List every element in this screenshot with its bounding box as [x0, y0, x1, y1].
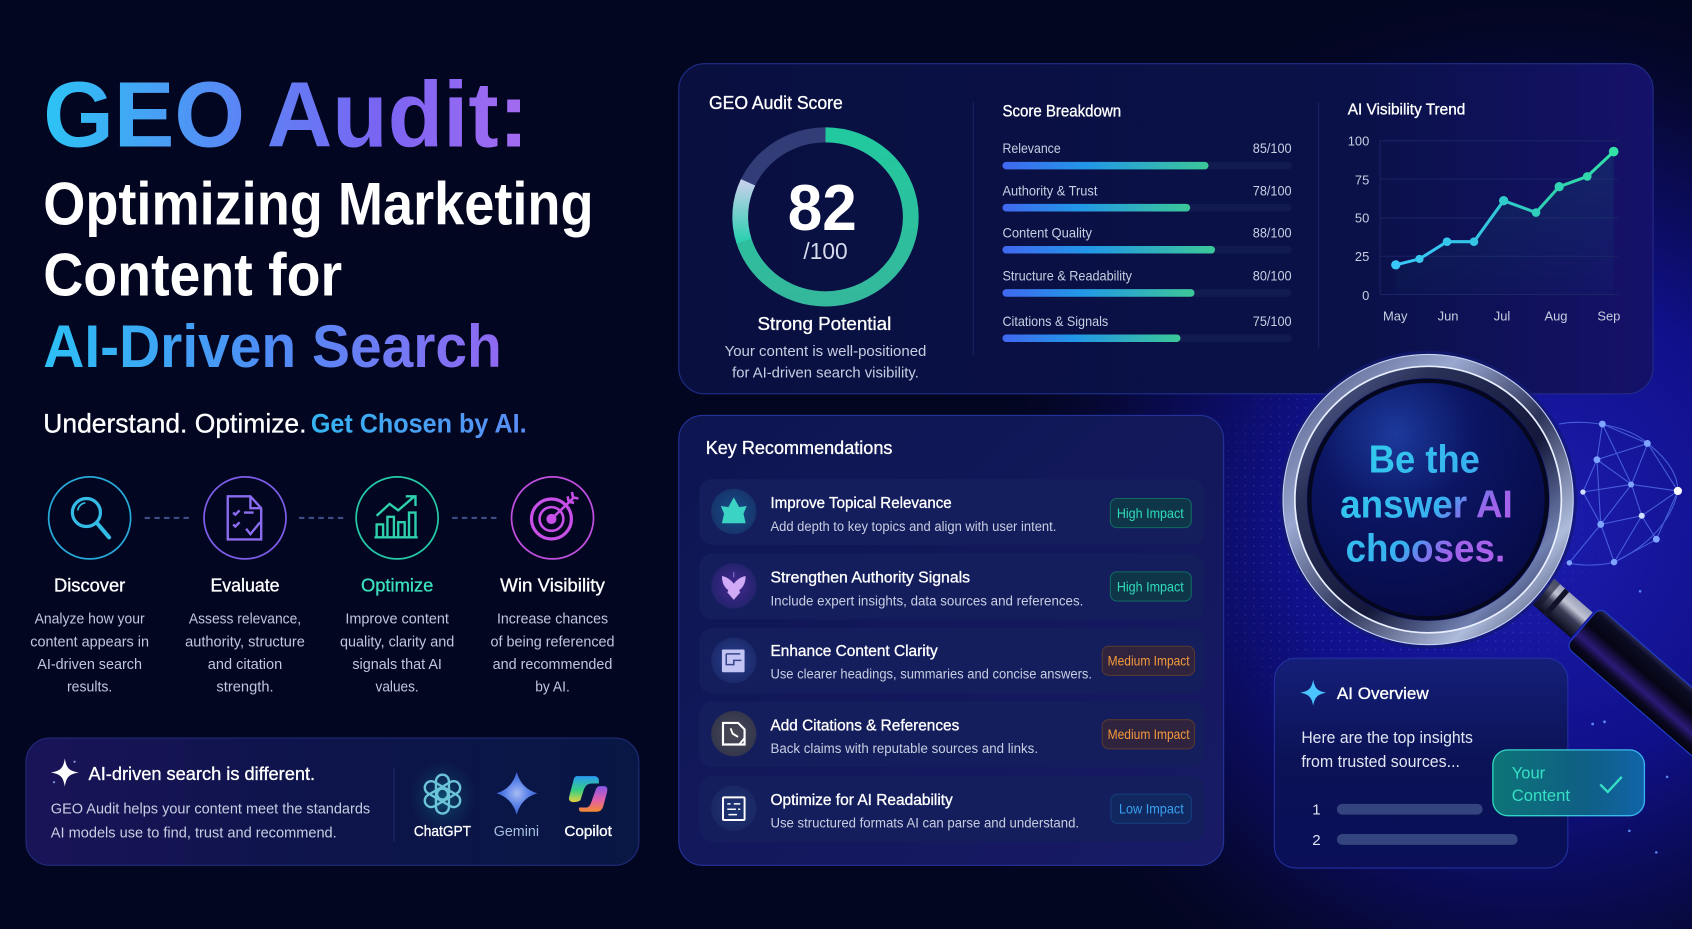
title line: Content for: Content for [43, 241, 342, 309]
magnifier handle [1532, 579, 1692, 795]
GEO audit score gauge: for AI-driven search visibility. [732, 365, 919, 382]
bar: Structure and Readability [1002, 269, 1292, 297]
line chart: AI visibility trend: Sep [1597, 308, 1620, 323]
bar: Citations and Signals [1002, 314, 1292, 342]
step: Optimize: signals that AI [352, 656, 442, 673]
tagline: Understand. Optimize. [43, 409, 307, 439]
badge: medium impact [1102, 720, 1195, 749]
bar: Content Quality: Content Quality [1002, 225, 1092, 240]
bar: Relevance: Relevance [1002, 141, 1061, 156]
panel: AI overview: AI Overview [1337, 684, 1430, 703]
icon: white outlined document [711, 711, 756, 756]
title line: AI-Driven Search: AI-Driven Search [43, 312, 502, 380]
line chart: AI visibility trend: Jul [1494, 308, 1510, 323]
badge: medium impact [1102, 646, 1195, 675]
recommendation: citations and references: Add Citations & References [770, 717, 959, 734]
recommendation: topical relevance [699, 479, 1204, 545]
recommendation: topical relevance: Add depth to key topics and align with user intent. [770, 518, 1056, 534]
line chart: AI visibility trend: 25 [1355, 249, 1369, 264]
badge: low impact [1111, 794, 1191, 823]
panel: key recommendations: Key Recommendations [706, 437, 892, 458]
line chart: AI visibility trend: Aug [1544, 308, 1567, 323]
step: Evaluate: and citation [208, 656, 282, 673]
recommendation: authority signals: Strengthen Authority Signals [770, 570, 970, 587]
step: Optimize: values. [376, 679, 419, 696]
panel: AI-driven search is different: GEO Audit helps your content meet the standards [51, 801, 370, 818]
callout: your content [1493, 750, 1644, 816]
icon: blue sparkle [1300, 680, 1326, 706]
badge: high impact: High Impact [1117, 506, 1184, 521]
lens text: chooses. [1346, 528, 1505, 571]
step: Win Visibility [490, 477, 615, 696]
magnifying glass [1279, 351, 1692, 795]
bar: Relevance: 85/100 [1253, 141, 1292, 156]
recommendation: AI readability: Use structured formats AI can parse and understand. [770, 815, 1079, 831]
line chart: AI visibility trend: 50 [1355, 210, 1369, 225]
GEO audit score gauge [709, 92, 926, 382]
recommendation: citations and references: Back claims with reputable sources and links. [770, 740, 1038, 756]
badge: medium impact: Medium Impact [1108, 654, 1190, 669]
step: Win Visibility: and recommended [493, 656, 612, 673]
lens text [1340, 439, 1513, 571]
bar: Structure and Readability: Structure & Readability [1002, 269, 1132, 284]
callout: your content: Content [1512, 786, 1570, 805]
recommendation: content clarity [699, 628, 1204, 694]
badge: high impact [1110, 572, 1191, 601]
panel: AI overview: from trusted sources... [1301, 753, 1460, 771]
badge: high impact [1110, 498, 1191, 528]
line chart: AI visibility trend: Jun [1438, 308, 1458, 323]
icon: target with arrow [512, 477, 594, 559]
GEO audit score gauge: Your content is well-positioned [725, 343, 926, 360]
lens text: answer AI [1340, 483, 1513, 526]
recommendation: citations and references [699, 701, 1204, 767]
score breakdown [1002, 103, 1292, 342]
step: Evaluate [185, 477, 305, 696]
recommendation: AI readability: Optimize for AI Readability [770, 792, 953, 809]
bar: Content Quality [1002, 225, 1292, 254]
recommendation: topical relevance: Improve Topical Relevance [770, 495, 952, 512]
line chart: AI visibility trend [1348, 101, 1620, 323]
callout: your content: Your [1512, 763, 1546, 782]
score ring [740, 135, 911, 299]
panel: score dashboard [679, 64, 1653, 394]
icon: lilac document [711, 638, 756, 683]
bar: Relevance [1002, 141, 1292, 169]
step: Discover: AI-driven search [37, 656, 142, 673]
lens text: Be the [1369, 439, 1480, 482]
tagline: Get Chosen by AI. [311, 409, 527, 439]
panel: AI-driven search is different: Gemini [494, 823, 539, 840]
title block [43, 63, 594, 380]
step: Evaluate: authority, structure [185, 633, 305, 650]
panel: AI-driven search is different: AI-driven search is different. [89, 763, 315, 784]
bar: Authority and Trust: 78/100 [1253, 183, 1292, 198]
step: Win Visibility: of being referenced [490, 633, 615, 650]
step: Win Visibility: by AI. [535, 679, 570, 696]
title line: GEO Audit: GEO Audit: [43, 63, 529, 167]
step: Optimize: quality, clarity and [340, 633, 454, 650]
icon: check mark [1600, 777, 1622, 792]
GEO audit score gauge: /100 [803, 238, 848, 264]
panel: AI overview: 2 [1312, 832, 1321, 849]
panel: AI-driven search is different: Copilot [564, 823, 613, 840]
recommendation: content clarity: Enhance Content Clarity [770, 643, 938, 660]
title line: Optimizing Marketing: Optimizing Marketing [43, 169, 594, 237]
panel: AI-driven search is different: ChatGPT [414, 823, 471, 840]
GEO audit score gauge: Strong Potential [758, 313, 891, 334]
icon: ChatGPT [409, 760, 476, 835]
network globe [1559, 421, 1682, 565]
recommendation: authority signals [699, 554, 1204, 619]
recommendation: AI readability [699, 776, 1204, 842]
step: Optimize: Optimize [361, 574, 433, 595]
GEO audit score gauge: GEO Audit Score [709, 92, 843, 113]
step: Discover: results. [67, 679, 112, 696]
step: Optimize: Improve content [345, 611, 450, 628]
step: Evaluate: strength. [216, 679, 274, 696]
step: Optimize [340, 477, 454, 696]
panel: key recommendations [679, 415, 1224, 865]
step: Discover: Discover [54, 574, 125, 595]
badge: medium impact: Medium Impact [1108, 727, 1190, 742]
panel: AI overview: 1 [1312, 802, 1321, 819]
bar: Citations and Signals: Citations & Signals [1002, 314, 1108, 329]
score breakdown: Score Breakdown [1002, 103, 1121, 121]
line chart: AI visibility trend: AI Visibility Trend [1348, 101, 1465, 118]
line chart: AI visibility trend: 100 [1348, 134, 1369, 149]
icon: Gemini star [496, 772, 537, 815]
panel: AI-driven search is different [26, 738, 639, 865]
icon: lilac butterfly [711, 563, 756, 609]
icon: white sparkle [51, 759, 79, 787]
icon: magnifying glass [49, 477, 131, 559]
icon: growth chart [356, 477, 438, 559]
line chart: AI visibility trend: May [1383, 308, 1408, 323]
icon: structured document [711, 785, 756, 831]
step: Discover [30, 477, 149, 696]
bar: Structure and Readability: 80/100 [1253, 269, 1292, 284]
process connectors [145, 517, 500, 519]
recommendation: content clarity: Use clearer headings, summaries and concise answers. [770, 666, 1092, 682]
badge: high impact: High Impact [1117, 579, 1184, 594]
panel: AI overview: Here are the top insights [1301, 729, 1473, 747]
panel: AI overview [1274, 658, 1568, 868]
tagline [43, 409, 527, 439]
bar: Citations and Signals: 75/100 [1253, 314, 1292, 329]
step: Win Visibility: Win Visibility [500, 574, 606, 595]
panel: AI-driven search is different: AI models use to find, trust and recommend. [51, 824, 337, 841]
magnifier lens [1279, 351, 1577, 648]
step: Evaluate: Assess relevance, [189, 611, 301, 628]
background [1058, 40, 1692, 929]
icon: Copilot [569, 776, 607, 812]
step: Evaluate: Evaluate [210, 574, 280, 595]
line chart: AI visibility trend: 0 [1362, 288, 1369, 303]
recommendation: authority signals: Include expert insights, data sources and references. [770, 592, 1083, 608]
step: Win Visibility: Increase chances [497, 611, 608, 628]
bar: Authority and Trust: Authority & Trust [1002, 183, 1098, 198]
step: Discover: Analyze how your [35, 611, 145, 628]
line chart: AI visibility trend: 75 [1355, 173, 1369, 188]
bar: Content Quality: 88/100 [1253, 225, 1292, 240]
GEO audit score gauge: 82 [788, 171, 857, 244]
icon: checklist document [204, 477, 286, 559]
icon: teal star [711, 489, 756, 534]
step: Discover: content appears in [30, 633, 149, 650]
badge: low impact: Low Impact [1119, 802, 1184, 817]
bar: Authority and Trust [1002, 183, 1292, 211]
